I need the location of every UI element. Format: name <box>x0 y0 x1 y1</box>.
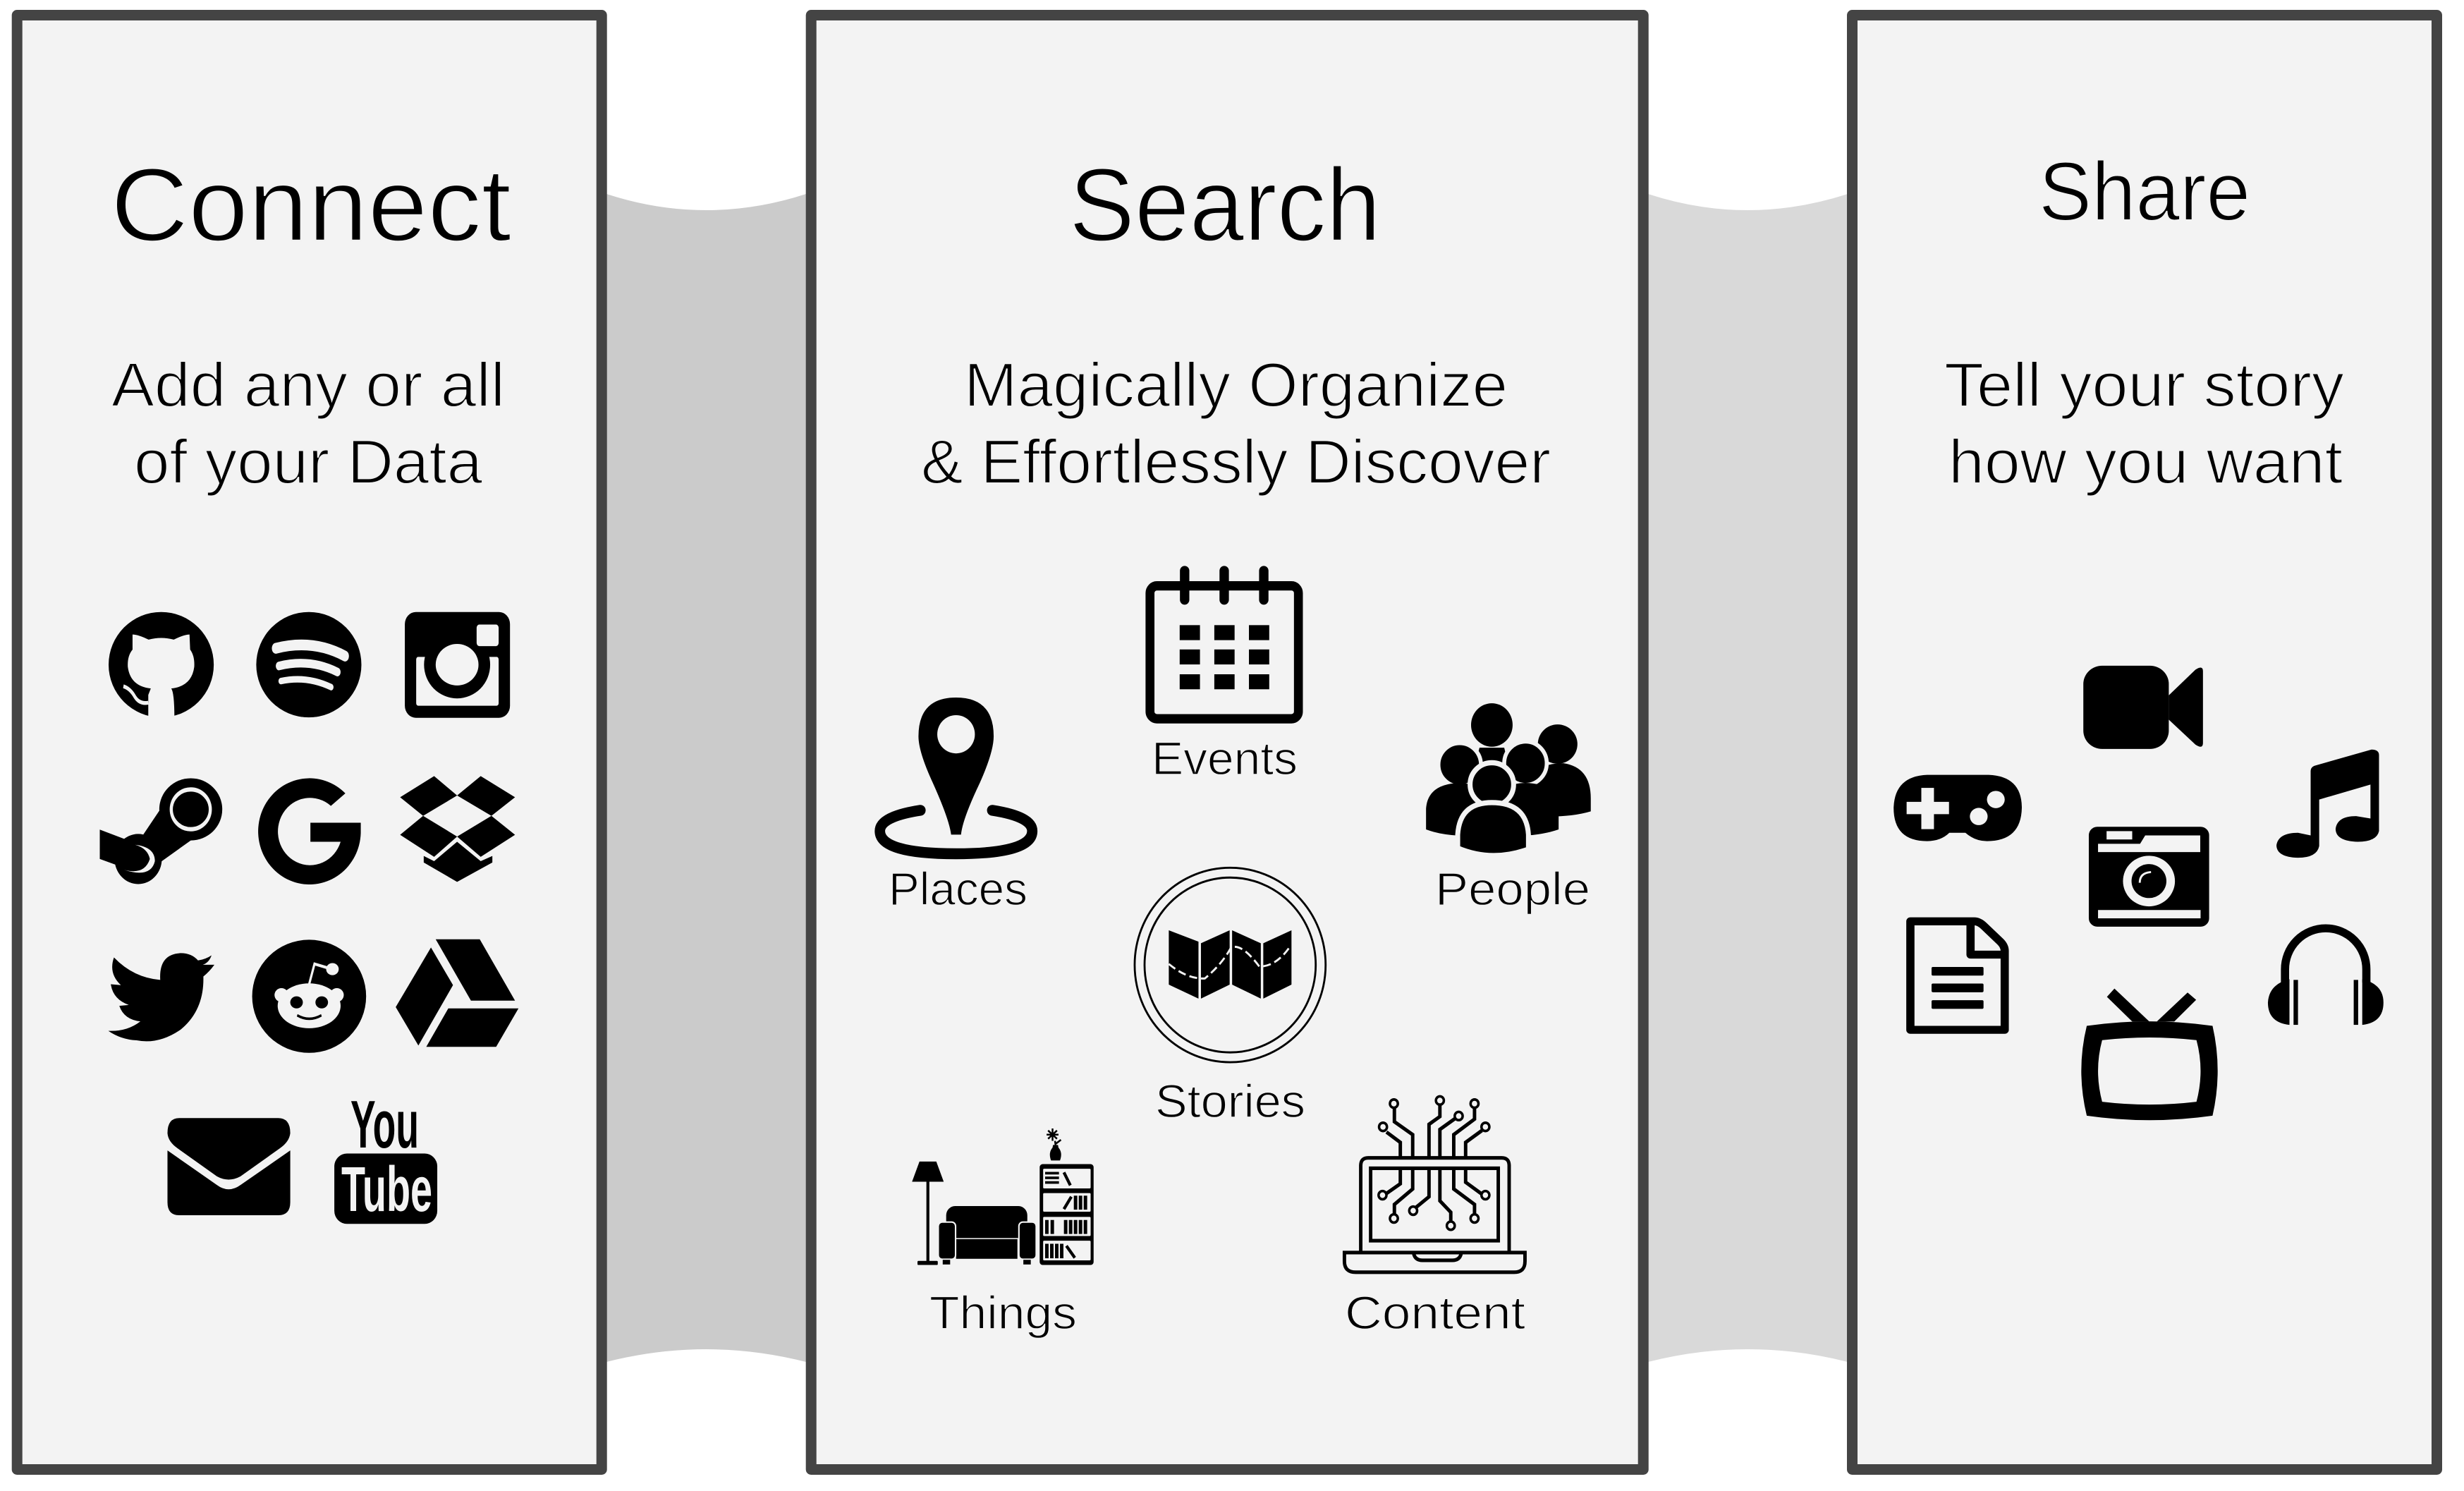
icon: music note <box>2276 750 2379 858</box>
icon: dropbox <box>400 776 515 882</box>
heading: Search: Search <box>1069 147 1381 263</box>
icon: people group <box>1426 703 1591 856</box>
icon: youtube <box>334 1087 437 1225</box>
icon: furniture with lamp, sofa and bookshelf <box>912 1128 1094 1265</box>
heading: Share: Share <box>2039 145 2250 238</box>
icon: spotify <box>256 612 361 717</box>
subtitle: Magically Organize & Effortlessly Discover <box>921 350 1551 497</box>
icon: google drive <box>396 939 518 1047</box>
panel: share <box>1852 16 2437 1470</box>
connector band: search to share <box>1648 194 1848 1362</box>
icon: map pin <box>880 698 1032 854</box>
icon: laptop with circuit traces <box>1344 1096 1525 1272</box>
icon: headphones <box>2268 928 2384 1025</box>
icon: document <box>1910 921 2005 1030</box>
icon: github <box>109 612 214 719</box>
panel frame: search <box>811 16 1643 1470</box>
subtitle: Add any or all of your Data <box>111 350 505 497</box>
heading: Connect: Connect <box>111 147 511 263</box>
label: Stories: Stories <box>1155 1075 1305 1127</box>
connector band: connect to search <box>606 194 806 1362</box>
subtitle: Tell your story how you want: Tell your story <box>1944 350 2344 420</box>
subtitle: Magically Organize & Effortlessly Discover: Magically Organize <box>964 350 1508 420</box>
label: Places: Places <box>889 863 1027 915</box>
label: Things: Things <box>929 1286 1077 1339</box>
icon: folded map in double ring <box>1135 868 1326 1062</box>
icon: steam <box>100 778 222 884</box>
icon: photo camera <box>2089 827 2209 927</box>
icon: reddit <box>252 939 366 1053</box>
icon: video camera <box>2083 666 2203 749</box>
icon grid: data sources <box>100 612 518 1225</box>
icon: game controller <box>1893 775 2022 841</box>
panel frame: connect <box>17 16 602 1470</box>
subtitle: Tell your story how you want <box>1944 350 2344 497</box>
icon: youtube: Tube <box>341 1155 432 1225</box>
subtitle: Tell your story how you want: how you want <box>1948 427 2343 497</box>
icon: twitter <box>109 953 214 1041</box>
icon: calendar <box>1150 571 1298 719</box>
label: Content: Content <box>1345 1286 1525 1339</box>
label: Events: Events <box>1152 732 1298 784</box>
icon: youtube: You <box>350 1087 419 1162</box>
icon: mail <box>167 1118 291 1215</box>
label: People: People <box>1435 863 1590 915</box>
panel frame: share <box>1852 16 2437 1470</box>
subtitle: Add any or all of your Data: of your Data <box>134 427 482 497</box>
icon: television <box>2081 989 2218 1120</box>
subtitle: Add any or all of your Data: Add any or all <box>111 350 505 420</box>
icon: instagram <box>405 612 510 718</box>
icon cluster: search facets <box>880 571 1591 1272</box>
subtitle: Magically Organize & Effortlessly Discover: & Effortlessly Discover <box>921 427 1551 497</box>
panel: search <box>811 16 1643 1470</box>
panel: connect <box>17 16 602 1470</box>
icon: google <box>258 778 361 884</box>
icon cluster: media types <box>1893 666 2384 1120</box>
